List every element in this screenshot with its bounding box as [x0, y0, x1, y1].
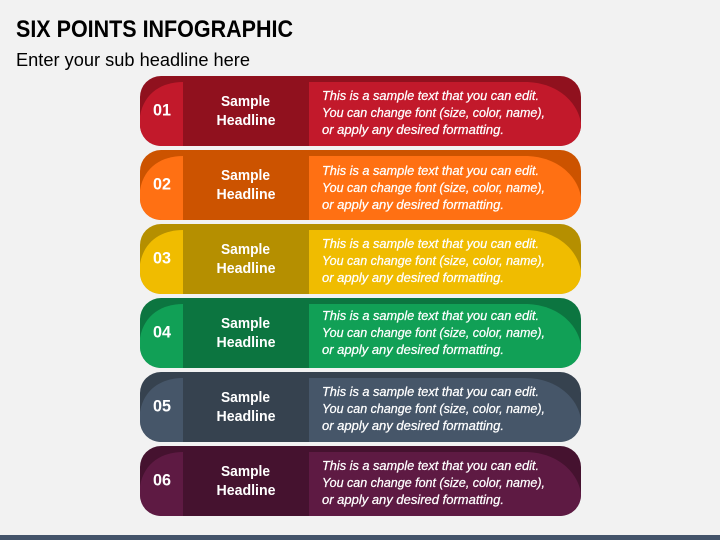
headline: Sample — [221, 464, 270, 480]
panel: point 06 — [140, 446, 581, 516]
panel: point 05 — [140, 372, 581, 442]
headline — [216, 464, 276, 499]
description — [322, 309, 545, 357]
number tab — [140, 230, 183, 294]
text panel — [309, 230, 581, 294]
panel: point 03 — [140, 224, 581, 294]
panel: point 02 — [140, 150, 581, 220]
description — [322, 164, 545, 212]
number: 03 — [153, 250, 171, 268]
description — [322, 459, 545, 507]
panel: point 04 — [140, 298, 581, 368]
description: You can change font (size, color, name), — [322, 181, 545, 195]
subtitle: Enter your sub headline here — [16, 50, 250, 70]
headline: Headline — [216, 261, 276, 277]
headline: Headline — [216, 187, 276, 203]
description: or apply any desired formatting. — [322, 493, 504, 507]
headline: Headline — [216, 409, 276, 425]
description: This is a sample text that you can edit. — [322, 89, 539, 103]
description: or apply any desired formatting. — [322, 198, 504, 212]
description: or apply any desired formatting. — [322, 123, 504, 137]
headline: Sample — [221, 94, 270, 110]
description: You can change font (size, color, name), — [322, 326, 545, 340]
text panel — [309, 156, 581, 220]
text panel — [309, 304, 581, 368]
headline: Headline — [216, 335, 276, 351]
dark band — [140, 76, 581, 146]
description — [322, 89, 545, 137]
description: You can change font (size, color, name), — [322, 476, 545, 490]
description: You can change font (size, color, name), — [322, 106, 545, 120]
description — [322, 237, 545, 285]
footer bar — [0, 535, 720, 540]
dark band — [140, 372, 581, 442]
number: 06 — [153, 472, 171, 490]
number: 01 — [153, 102, 171, 120]
description: or apply any desired formatting. — [322, 271, 504, 285]
headline — [216, 168, 276, 203]
description: This is a sample text that you can edit. — [322, 385, 539, 399]
description: This is a sample text that you can edit. — [322, 309, 539, 323]
headline — [216, 242, 276, 277]
description: This is a sample text that you can edit. — [322, 164, 539, 178]
description — [322, 385, 545, 433]
headline: Sample — [221, 168, 270, 184]
description: or apply any desired formatting. — [322, 419, 504, 433]
dark band — [140, 150, 581, 220]
text panel — [309, 82, 581, 146]
headline — [216, 316, 276, 351]
headline: Sample — [221, 242, 270, 258]
number: 04 — [153, 324, 172, 342]
headline: Headline — [216, 483, 276, 499]
number tab — [140, 82, 183, 146]
description: or apply any desired formatting. — [322, 343, 504, 357]
headline: Sample — [221, 316, 270, 332]
dark band — [140, 298, 581, 368]
description: This is a sample text that you can edit. — [322, 237, 539, 251]
description: You can change font (size, color, name), — [322, 402, 545, 416]
number: 05 — [153, 398, 171, 416]
dark band — [140, 446, 581, 516]
panel: point 01 — [140, 76, 581, 146]
text panel — [309, 378, 581, 442]
number: 02 — [153, 176, 171, 194]
number tab — [140, 156, 183, 220]
text panel — [309, 452, 581, 516]
number tab — [140, 304, 183, 368]
headline — [216, 94, 276, 129]
headline: Sample — [221, 390, 270, 406]
description: You can change font (size, color, name), — [322, 254, 545, 268]
description: This is a sample text that you can edit. — [322, 459, 539, 473]
number tab — [140, 452, 183, 516]
dark band — [140, 224, 581, 294]
headline: Headline — [216, 113, 276, 129]
number tab — [140, 378, 183, 442]
title: SIX POINTS INFOGRAPHIC — [16, 16, 293, 43]
headline — [216, 390, 276, 425]
